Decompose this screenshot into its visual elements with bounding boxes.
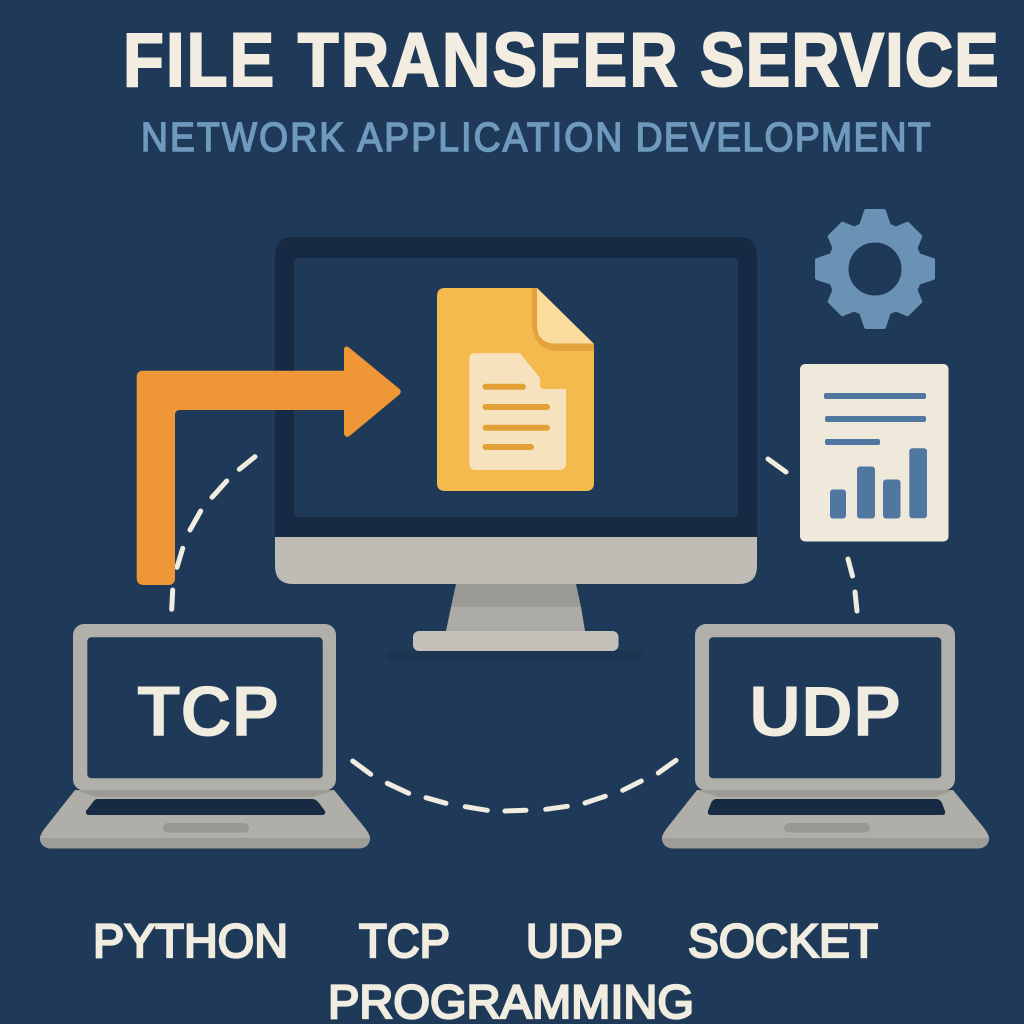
monitor: [275, 237, 757, 660]
title: [123, 18, 999, 103]
keywords: TCP: [359, 914, 450, 967]
keywords: UDP: [526, 914, 623, 967]
subtitle: [141, 116, 931, 160]
dashed connection arcs: [172, 457, 857, 811]
bar chart: [830, 448, 927, 518]
subtitle: NETWORK: [141, 116, 344, 160]
subtitle: DEVELOPMENT: [636, 116, 931, 160]
keywords: [93, 914, 878, 1024]
keywords: SOCKET: [688, 914, 878, 967]
label: UDP: UDP: [749, 673, 901, 752]
laptop: UDP: [662, 624, 989, 848]
laptop: TCP: [40, 624, 370, 848]
title: TRANSFER: [298, 18, 678, 103]
title: FILE: [123, 18, 274, 103]
arrow: [137, 347, 401, 585]
panel: report: [800, 364, 948, 542]
subtitle: APPLICATION: [357, 116, 622, 160]
icon: document: [437, 288, 594, 491]
icon: gear: [817, 211, 933, 327]
label: TCP: TCP: [137, 673, 279, 752]
title: SERVICE: [700, 18, 999, 103]
keywords: PYTHON: [93, 914, 288, 967]
